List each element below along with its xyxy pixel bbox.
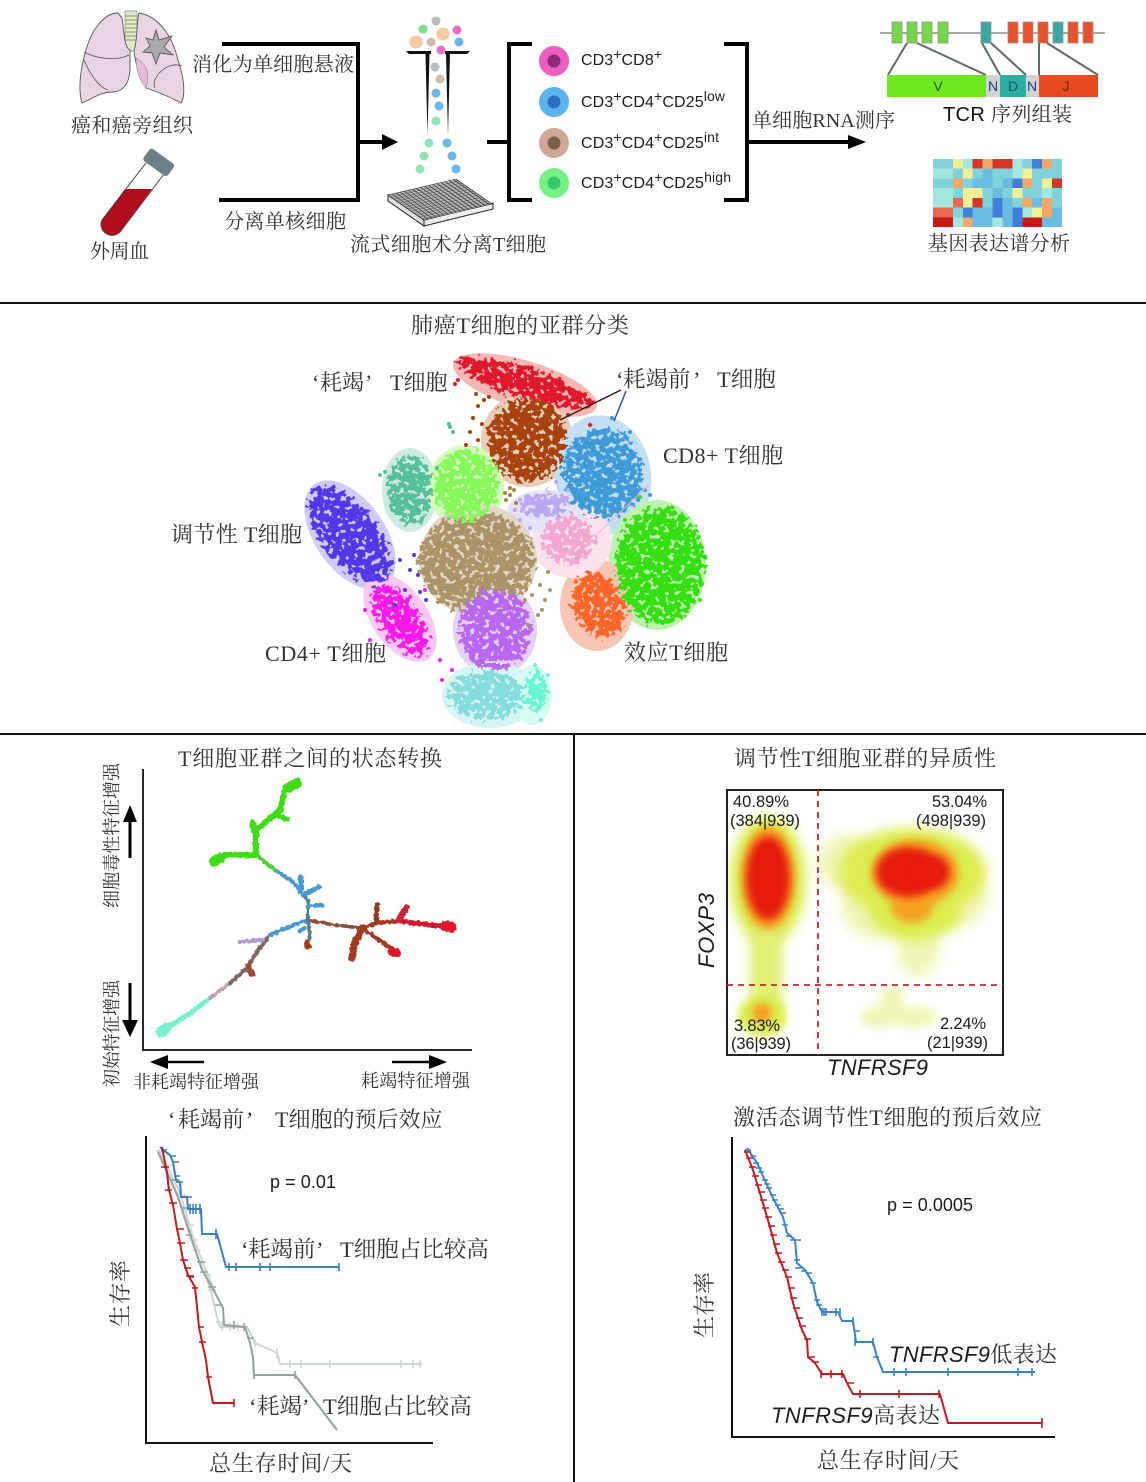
p value: p = 0.0005 — [887, 1195, 973, 1215]
axis label: FOXP3: FOXP3 — [694, 892, 719, 968]
diagram: TCR assembly — [880, 22, 1105, 97]
chart: trajectory — [122, 769, 472, 1069]
label: exhausted: ’ — [365, 370, 372, 395]
axes — [146, 1136, 433, 1443]
label: CD25 int: CD3 — [581, 135, 613, 152]
label: flow sorting: 流式细胞术分离T细胞 — [350, 233, 546, 256]
heading: pre-exhausted prognosis: T细胞的预后效应 — [275, 1107, 442, 1132]
label: sequencing: 单细胞RNA测序 — [752, 109, 895, 132]
label: exhausted high: ‘ — [249, 1394, 256, 1419]
label: CD25 high: + — [654, 169, 662, 185]
icon: CD25 int cell — [539, 128, 569, 158]
diagram: TCR assembly: N — [988, 78, 998, 94]
icon: blood tube — [101, 148, 175, 235]
label: CD25 int: CD4 — [622, 135, 654, 152]
cluster halos — [286, 340, 706, 728]
chart: survival left — [146, 1136, 433, 1443]
heading: state transition: T细胞亚群之间的状态转换 — [178, 746, 442, 771]
gates — [727, 790, 1003, 1055]
icon: well plate — [388, 179, 493, 226]
label: CD25 high: CD3 — [581, 175, 613, 192]
curve: high expression — [744, 1150, 1042, 1428]
label: pre-exhausted: ’ — [693, 367, 700, 392]
label: TNFRSF9 high: TNFRSF9高表达 — [771, 1403, 940, 1428]
axis label: exhausted: 耗竭特征增强 — [361, 1071, 471, 1091]
stray points — [365, 362, 702, 720]
label: peripheral blood: 外周血 — [90, 240, 149, 263]
quadrant values: (36|939) — [731, 1035, 791, 1053]
quadrant values: 53.04% — [932, 793, 987, 811]
label: exhausted: 耗竭 — [320, 370, 364, 395]
quadrant values: 40.89% — [733, 793, 789, 811]
label: exhausted: ‘ — [312, 370, 319, 395]
arrow: cytotoxic up — [123, 805, 137, 858]
label: isolate mononuclear: 分离单核细胞 — [224, 210, 346, 233]
label: CD25 high: + — [613, 169, 622, 185]
axis label: survival: 生存率 — [692, 1272, 717, 1338]
label: TCR: TCR 序列组装 — [943, 103, 1072, 126]
label: CD25 int: CD25 — [662, 135, 704, 152]
heading: pre-exhausted prognosis: 耗竭前 — [178, 1107, 244, 1132]
icon: tumor — [143, 30, 173, 64]
label: CD25 low: CD3 — [581, 94, 613, 111]
axes — [732, 1137, 1055, 1437]
label: CD8+: CD8+ T细胞 — [663, 443, 783, 468]
heading: pre-exhausted prognosis: ‘ — [168, 1107, 175, 1132]
icon: CD25 low cell — [539, 87, 569, 117]
heading: activated Treg prognosis: 激活态调节性T细胞的预后效应 — [733, 1105, 1042, 1130]
arrow: exhausted right — [392, 1055, 447, 1069]
label: expression profiling: 基因表达谱分析 — [928, 232, 1070, 255]
axis label: time: 总生存时间/天 — [817, 1448, 959, 1473]
arrow: input bracket — [221, 44, 398, 200]
curve: low expression — [745, 1148, 1035, 1376]
chart: t-SNE clusters — [284, 339, 711, 728]
curve: red — [161, 1147, 234, 1407]
quadrant values: 2.24% — [940, 1015, 986, 1033]
axis label: non-exhausted: 非耗竭特征增强 — [133, 1072, 260, 1092]
label: pre-exhausted high: ‘ — [241, 1237, 248, 1262]
axis label: cytotoxic: 细胞毒性特征增强 — [102, 762, 122, 908]
label: pre-exhausted: 耗竭前 — [623, 367, 691, 392]
quadrant values: 3.83% — [734, 1017, 780, 1035]
label: pre-exhausted high: T细胞占比较高 — [340, 1237, 489, 1262]
panel: workflow — [71, 11, 1105, 263]
density clouds — [730, 816, 988, 1036]
label: CD4+: CD4+ T细胞 — [265, 641, 386, 666]
quadrant values: (384|939) — [730, 812, 800, 830]
label: CD3+CD8+: CD3 — [581, 52, 613, 69]
label: CD3+CD8+: + — [654, 46, 662, 62]
axis label: survival: 生存率 — [108, 1260, 133, 1327]
heading: Treg heterogeneity: 调节性T细胞亚群的异质性 — [734, 746, 996, 771]
arrow: naive down — [122, 983, 138, 1037]
label: CD25 low: low — [704, 88, 726, 104]
label: CD25 high: CD4 — [622, 175, 654, 192]
label: CD25 low: CD25 — [662, 94, 704, 111]
label: CD25 low: + — [654, 88, 662, 104]
label: CD25 low: + — [613, 88, 622, 104]
cluster points — [284, 339, 711, 726]
axis label: TNFRSF9: TNFRSF9 — [827, 1055, 928, 1080]
plot frame — [727, 790, 1003, 1055]
label: effector: 效应T细胞 — [624, 640, 728, 665]
label: exhausted high: 耗竭 — [257, 1394, 302, 1419]
icon: CD3+CD8+ cell — [539, 46, 569, 76]
label: tissue: 癌和癌旁组织 — [71, 114, 194, 137]
label: exhausted: T细胞 — [390, 370, 447, 395]
label: exhausted high: T细胞占比较高 — [323, 1394, 472, 1419]
diagram: TCR assembly: J — [1062, 78, 1070, 94]
icon: flow cytometry funnel — [406, 16, 470, 174]
quadrant values — [730, 793, 988, 1053]
label: exhausted high: ’ — [302, 1394, 310, 1419]
divider — [0, 303, 1146, 1482]
curve: dark grey — [158, 1152, 337, 1430]
label: CD3+CD8+: + — [613, 46, 621, 62]
label: pre-exhausted: ‘ — [616, 367, 624, 392]
diagram: TCR assembly: V — [933, 78, 943, 94]
icon: CD25 high cell — [539, 168, 569, 198]
axis label: time: 总生存时间/天 — [209, 1451, 352, 1476]
label: CD25 low: CD4 — [622, 94, 654, 111]
label: CD3+CD8+: CD8 — [622, 52, 654, 69]
label: CD25 high: high — [704, 169, 731, 185]
label: digest: 消化为单细胞悬液 — [192, 53, 354, 76]
axes — [143, 769, 472, 1050]
label: pre-exhausted: T细胞 — [717, 367, 776, 392]
chart: expression heatmap — [933, 159, 1062, 227]
label: TNFRSF9 low: TNFRSF9低表达 — [889, 1342, 1057, 1367]
heading: subsets: 肺癌T细胞的亚群分类 — [411, 313, 629, 338]
trajectory branches — [161, 783, 451, 1032]
axis label: naive: 初始特征增强 — [102, 979, 122, 1087]
diagram: TCR assembly: N — [1027, 78, 1037, 94]
label: CD25 int: + — [654, 129, 662, 145]
label: CD25 high: CD25 — [663, 175, 704, 192]
chart: survival right — [732, 1137, 1055, 1437]
curve: blue — [160, 1147, 339, 1271]
label: CD25 int: + — [613, 129, 622, 145]
quadrant values: (498|939) — [916, 812, 986, 830]
arrow: non-exhausted left — [150, 1055, 204, 1069]
curve: light grey — [157, 1150, 422, 1368]
chart: density scatter — [727, 790, 1003, 1055]
bracket: cell types — [489, 44, 530, 200]
label: regulatory: 调节性 T细胞 — [171, 522, 302, 547]
heading: pre-exhausted prognosis: ’ — [246, 1107, 253, 1132]
p value: p = 0.01 — [270, 1172, 336, 1192]
label: CD25 int: int — [704, 129, 719, 145]
arrow: to sequencing — [726, 44, 866, 200]
quadrant values: (21|939) — [927, 1034, 988, 1052]
callout: pre-exhausted lines — [560, 390, 650, 536]
diagram: TCR assembly: D — [1008, 78, 1018, 94]
label: pre-exhausted high: ’ — [316, 1237, 324, 1262]
icon: lungs — [80, 11, 184, 103]
label: pre-exhausted high: 耗竭前 — [248, 1237, 316, 1262]
